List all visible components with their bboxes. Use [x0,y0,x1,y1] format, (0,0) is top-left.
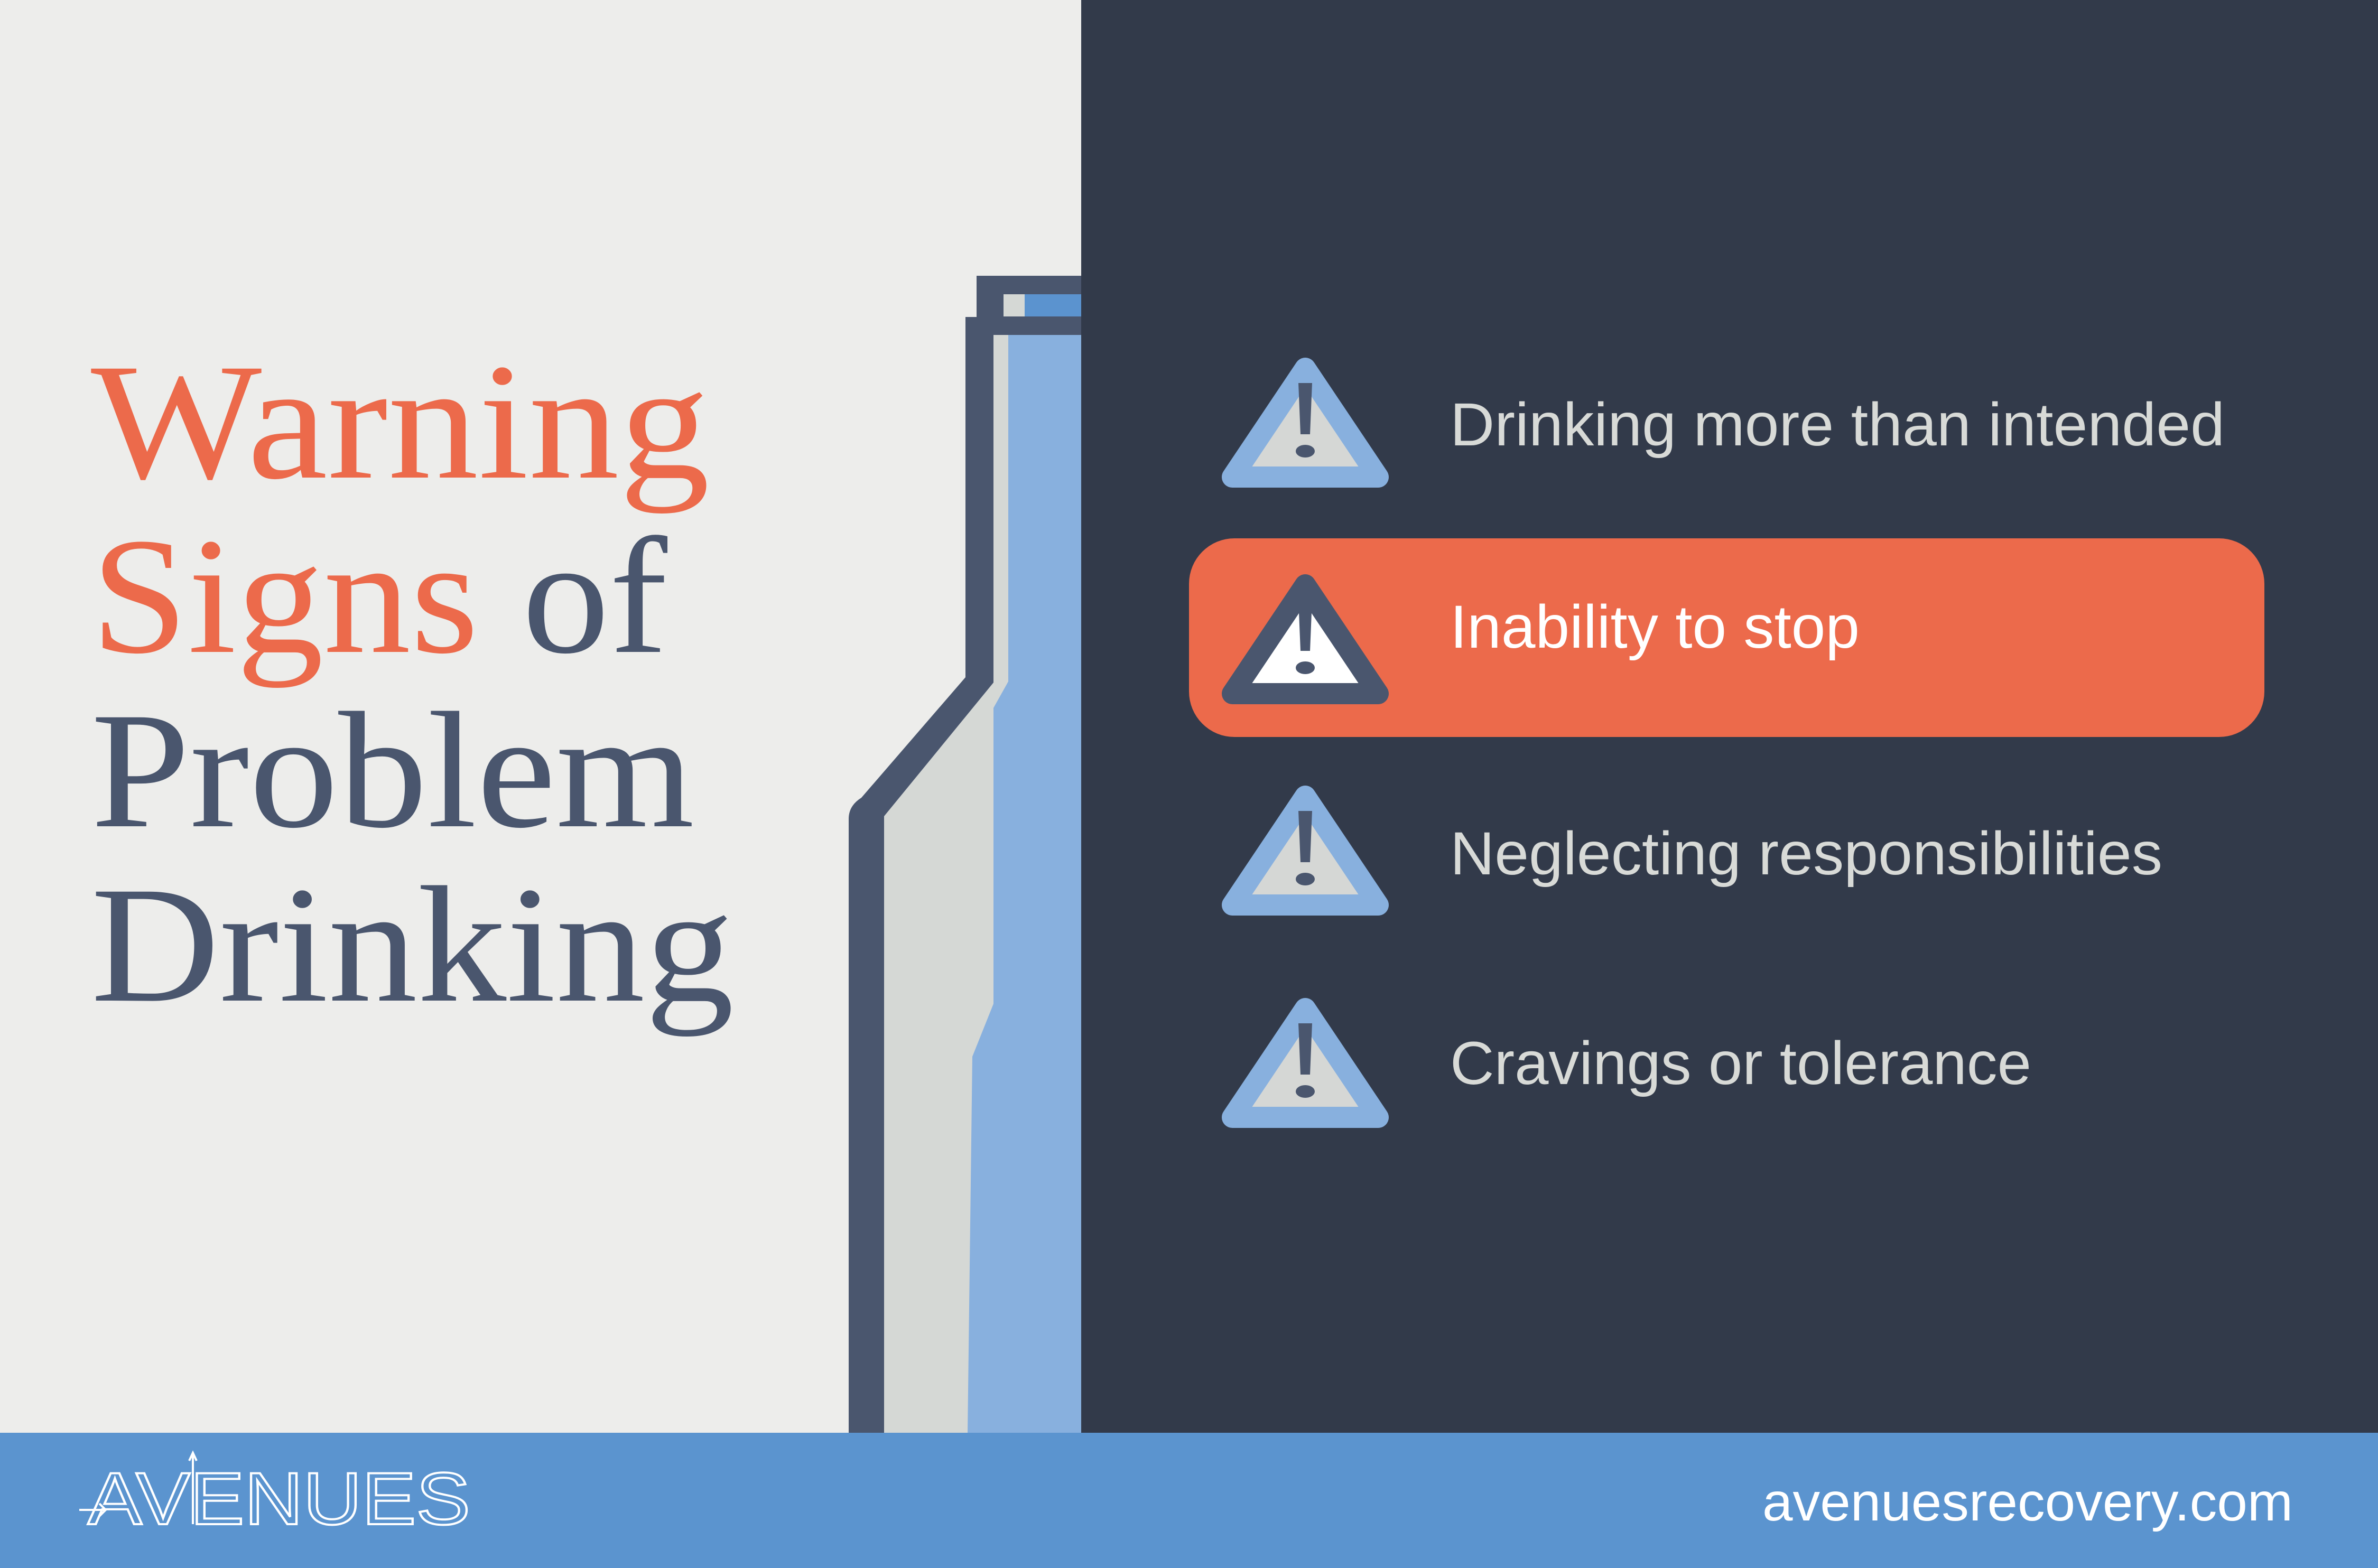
logo: AVENUES [88,1457,470,1540]
icon: warning 3 [1232,796,1378,905]
title: Drinking [91,853,734,1037]
illustration: bottle [849,276,1081,1433]
panel: dark right panel [1081,0,2378,1433]
icon: warning 2 (highlighted) [1232,585,1378,694]
title: Problem [91,678,694,863]
list text: Neglecting responsibilities [1450,820,2162,888]
icon: warning 4 [1232,1009,1378,1117]
list text [1450,391,2225,1097]
highlight box [1189,538,2264,737]
title [91,330,734,1037]
list text: Cravings or tolerance [1450,1030,2031,1097]
url: avenuesrecovery.com [1762,1472,2293,1532]
title: Signs of [91,504,670,688]
title: Warning [91,330,710,514]
list text: Inability to stop [1450,593,1860,661]
footer [0,1433,2378,1568]
icon: warning 1 [1232,368,1378,477]
list text: Drinking more than intended [1450,391,2225,459]
